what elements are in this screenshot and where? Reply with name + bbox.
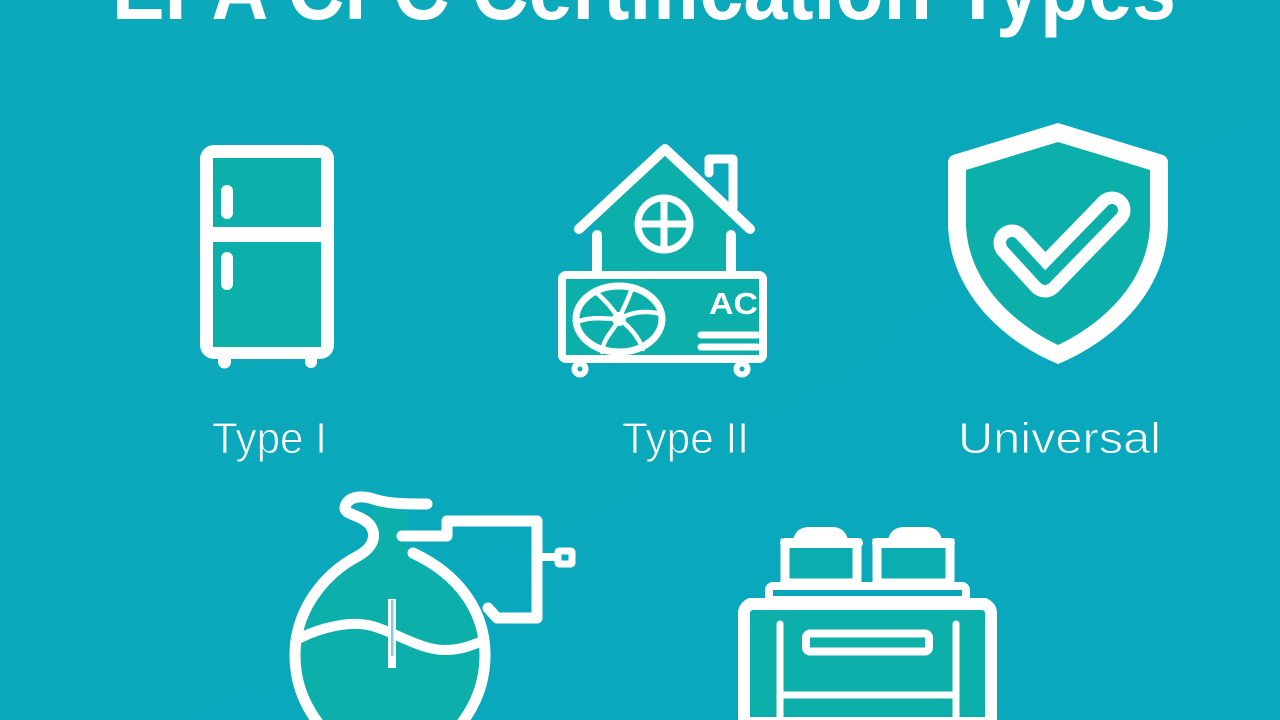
label: Type I: Type I <box>212 414 327 463</box>
icon: recovery machine <box>744 527 991 720</box>
label: Universal: Universal <box>958 414 1161 463</box>
icon: refrigerant recovery tank <box>295 497 572 720</box>
icon: house with AC unit (Type II) <box>562 149 763 374</box>
icon: shield with check (Universal) <box>948 123 1168 364</box>
icon: refrigerator (Type I) <box>200 145 334 369</box>
icon: house with AC unit (Type II): AC <box>709 286 758 321</box>
label: Type II: Type II <box>622 414 749 463</box>
